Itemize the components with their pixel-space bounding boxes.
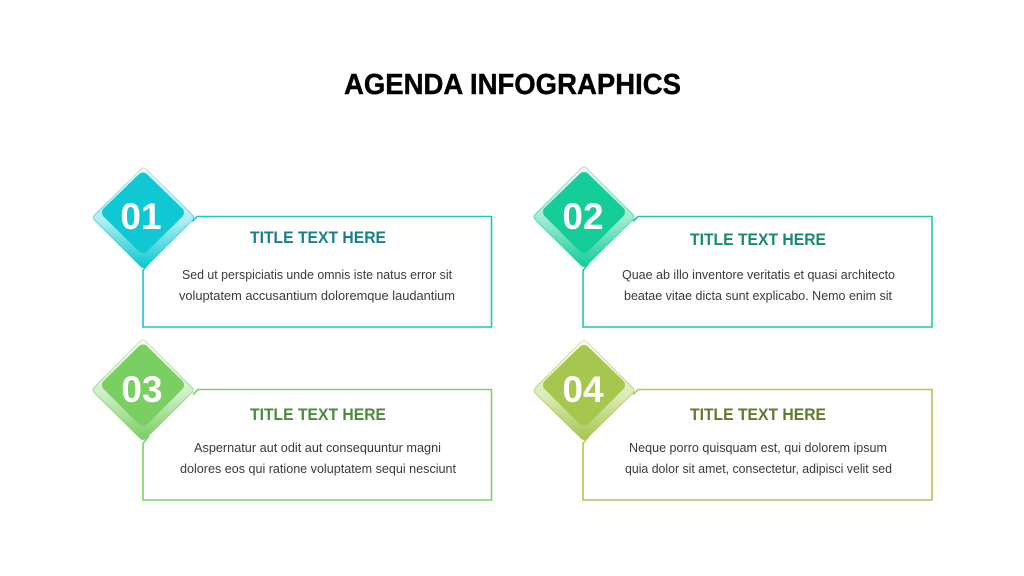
panel frame 02 (583, 216, 932, 327)
body text 03: Aspernatur aut odit aut consequuntur magni (194, 441, 441, 455)
panel: agenda item 04 (538, 344, 932, 500)
heading 03: TITLE TEXT HERE (250, 405, 386, 424)
heading 02: TITLE TEXT HERE (690, 230, 826, 249)
heading 04: TITLE TEXT HERE (690, 405, 826, 424)
body text 01 (179, 268, 455, 303)
number 01: 01 (120, 196, 162, 237)
number 04: 04 (562, 369, 604, 410)
number 03: 03 (121, 369, 163, 410)
body text 02: beatae vitae dicta sunt explicabo. Nemo enim sit (624, 289, 893, 303)
title: AGENDA INFOGRAPHICS (344, 69, 681, 101)
body text 04: quia dolor sit amet, consectetur, adipisci velit sed (625, 462, 892, 476)
panel frame 03 (143, 390, 492, 500)
body text 01: Sed ut perspiciatis unde omnis iste natus error sit (182, 268, 453, 282)
number 02: 02 (562, 196, 604, 237)
body text 02: Quae ab illo inventore veritatis et quasi architecto (622, 268, 895, 282)
icon: diamond 03 (96, 344, 190, 436)
panel: agenda item 02 (538, 170, 932, 327)
panel frame 04 (583, 390, 932, 500)
body text 04 (625, 441, 892, 476)
heading 01: TITLE TEXT HERE (250, 228, 386, 247)
body text 03 (180, 441, 457, 476)
panel: agenda item 03 (96, 344, 492, 500)
body text 02 (622, 268, 895, 303)
icon: diamond 04 (538, 344, 630, 436)
body text 01: voluptatem accusantium doloremque laudantium (179, 289, 455, 303)
panel frame 01 (143, 216, 492, 327)
panel: agenda item 01 (97, 172, 492, 327)
icon: diamond 01 (97, 172, 190, 264)
body text 03: dolores eos qui ratione voluptatem sequi nesciunt (180, 462, 457, 476)
icon: diamond 02 (538, 170, 630, 263)
body text 04: Neque porro quisquam est, qui dolorem ipsum (629, 441, 887, 455)
